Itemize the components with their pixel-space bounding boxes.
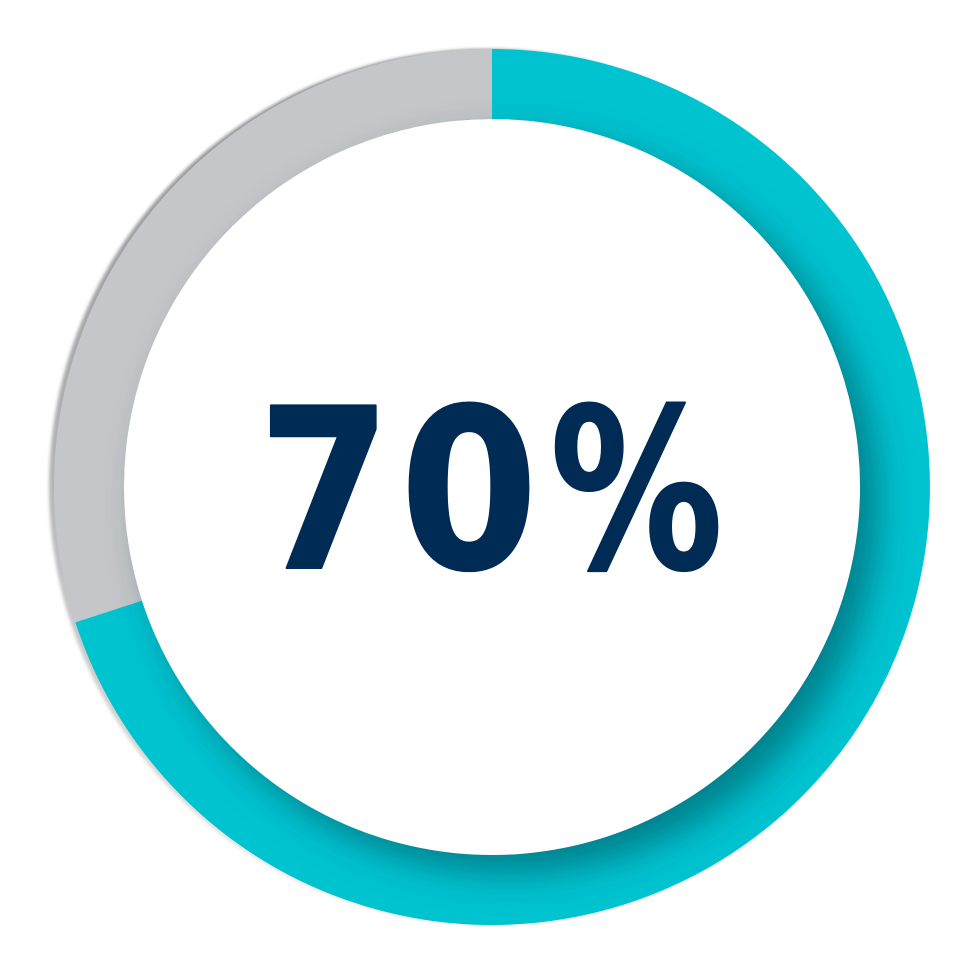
centre disc [124,119,860,855]
ring progress: 70% [75,49,930,925]
percentage label: 0 [400,361,538,621]
percentage label [258,361,723,621]
ring outer shadow crescent [49,49,925,925]
inner shadow cast on ring [142,137,878,873]
percentage label: 7 [258,361,391,621]
ring track: remaining 30% [54,49,492,622]
percentage label: % [550,361,723,621]
